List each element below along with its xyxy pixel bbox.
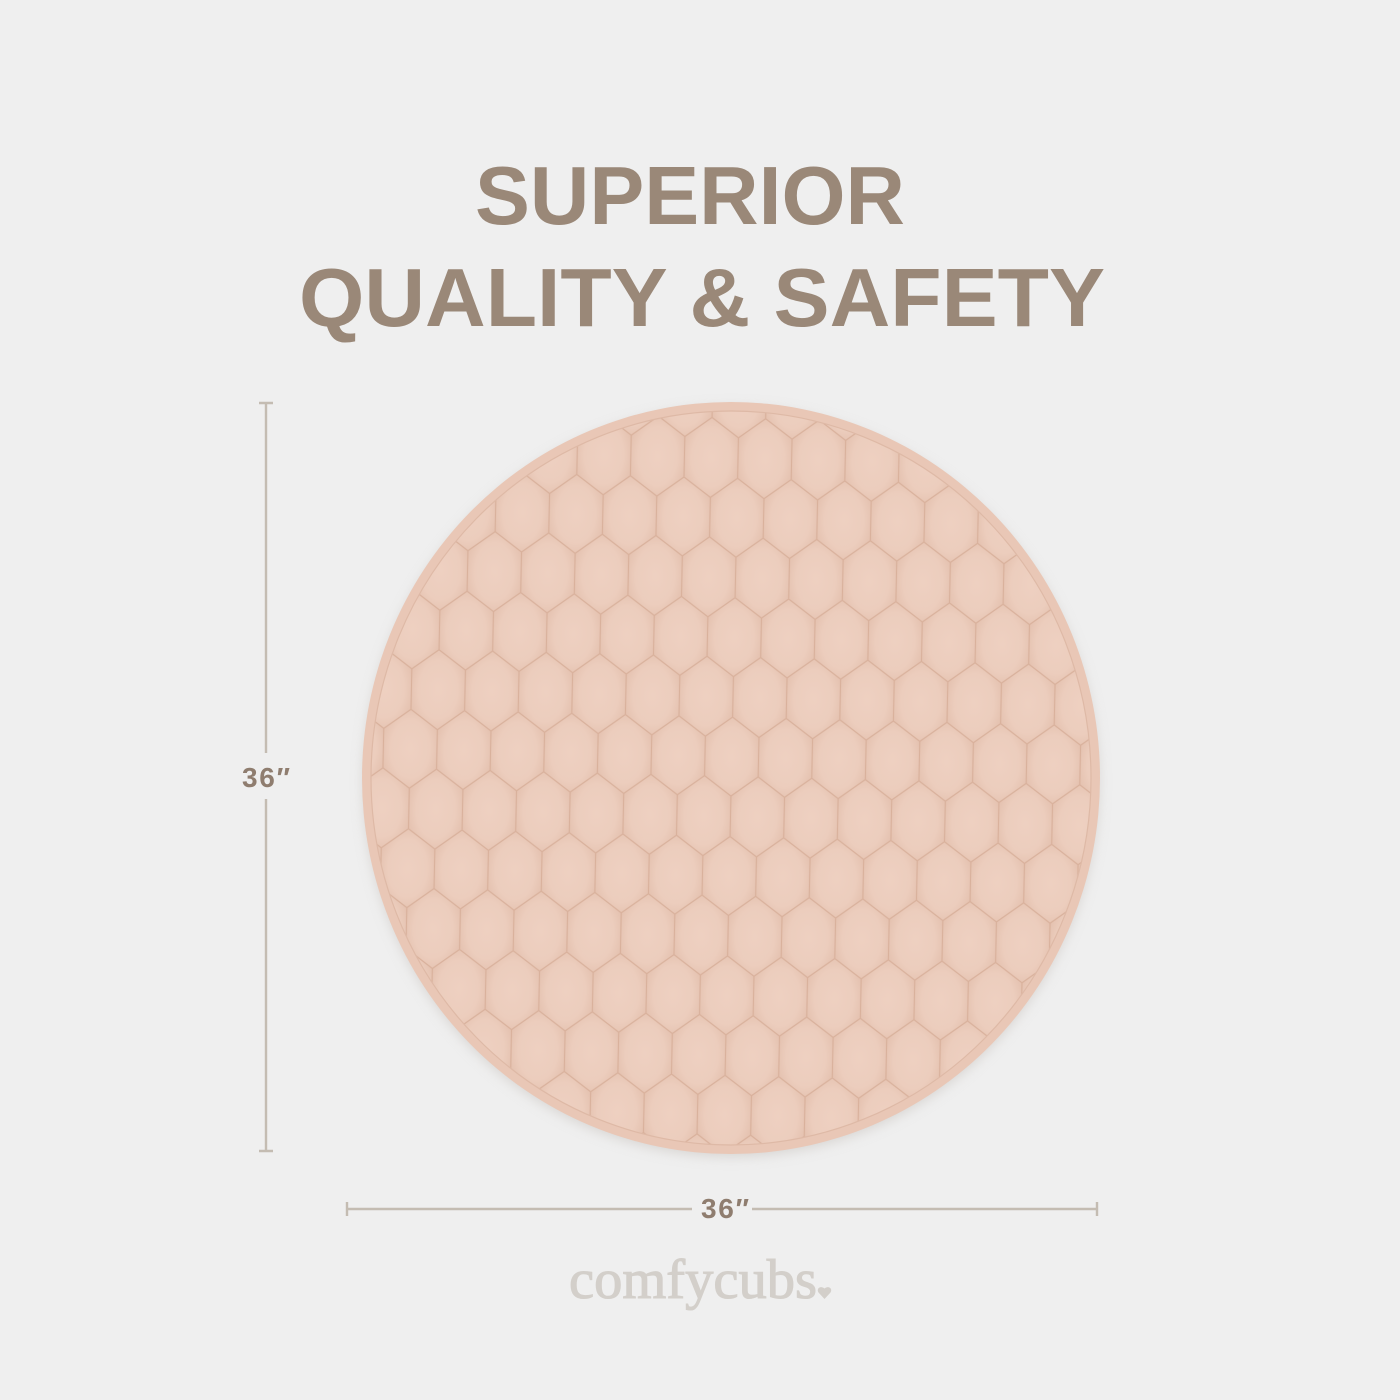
logo wordmark: comfycubs: [569, 1249, 817, 1311]
icon: logo heart: [818, 1287, 831, 1299]
title line 2: QUALITY & SAFETY: [299, 251, 1105, 344]
mat shadow: [363, 407, 1099, 1157]
quilted honeycomb surface: [371, 411, 1091, 1145]
logo: comfycubs: [569, 1249, 831, 1311]
vertical dimension: 36 inches: [242, 403, 290, 1151]
vertical dimension label: 36″: [242, 762, 290, 793]
horizontal measure line: [347, 1202, 1097, 1216]
horizontal dimension: 36 inches: [347, 1193, 1097, 1224]
product: round quilted honeycomb mat: [362, 402, 1100, 1157]
vertical measure line: [259, 403, 273, 1151]
title line 1: SUPERIOR: [475, 149, 905, 242]
horizontal dimension label: 36″: [701, 1193, 749, 1224]
mat binding edge: [362, 402, 1100, 1154]
title: [299, 149, 1105, 344]
